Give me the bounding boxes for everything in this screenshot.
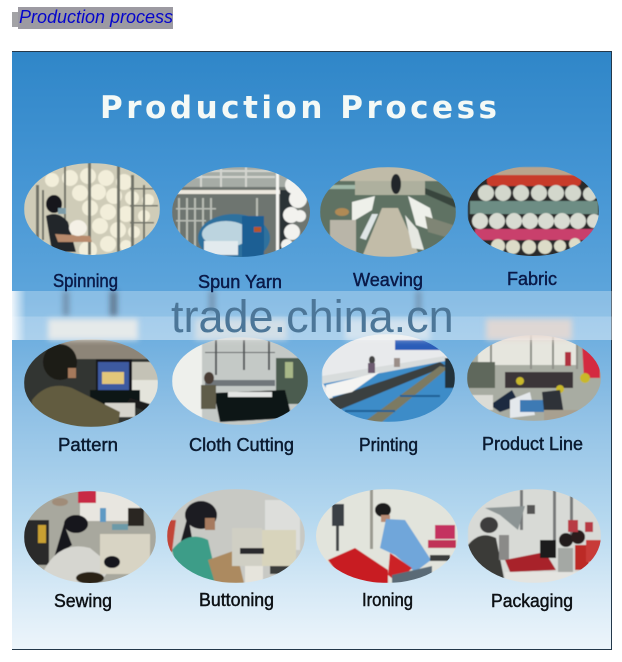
- label: Pattern: Pattern: [58, 435, 118, 455]
- photo: spinning: [24, 163, 160, 259]
- label: Product Line: Product Line: [482, 434, 583, 454]
- label: Printing: Printing: [359, 435, 418, 455]
- photo: cloth cutting: [172, 337, 308, 425]
- watermark text: trade.china.cn: [171, 291, 454, 342]
- photo: buttoning: [167, 489, 305, 583]
- label: Spun Yarn: Spun Yarn: [198, 272, 282, 292]
- label: Packaging: Packaging: [491, 591, 573, 611]
- photo: ironing: [315, 489, 458, 583]
- label: Ironing: Ironing: [362, 590, 413, 610]
- heading: Production process: Production process: [19, 7, 173, 27]
- photo: fabric: [468, 167, 601, 257]
- photo: pattern: [24, 339, 158, 427]
- photo: spun yarn: [172, 167, 311, 262]
- label: Sewing: Sewing: [54, 591, 112, 611]
- watermark band: [12, 291, 612, 342]
- label: Cloth Cutting: Cloth Cutting: [189, 435, 294, 455]
- label: Weaving: Weaving: [353, 270, 423, 290]
- photo: packaging: [468, 489, 601, 583]
- photo: product line: [467, 335, 601, 421]
- photo: weaving: [320, 167, 456, 257]
- photo: printing: [322, 334, 455, 422]
- photo: sewing: [24, 491, 156, 584]
- label: Buttoning: Buttoning: [199, 590, 274, 610]
- label: Spinning: Spinning: [53, 271, 118, 291]
- title: Production Process: Production Process: [100, 90, 497, 126]
- label: Fabric: Fabric: [507, 269, 557, 289]
